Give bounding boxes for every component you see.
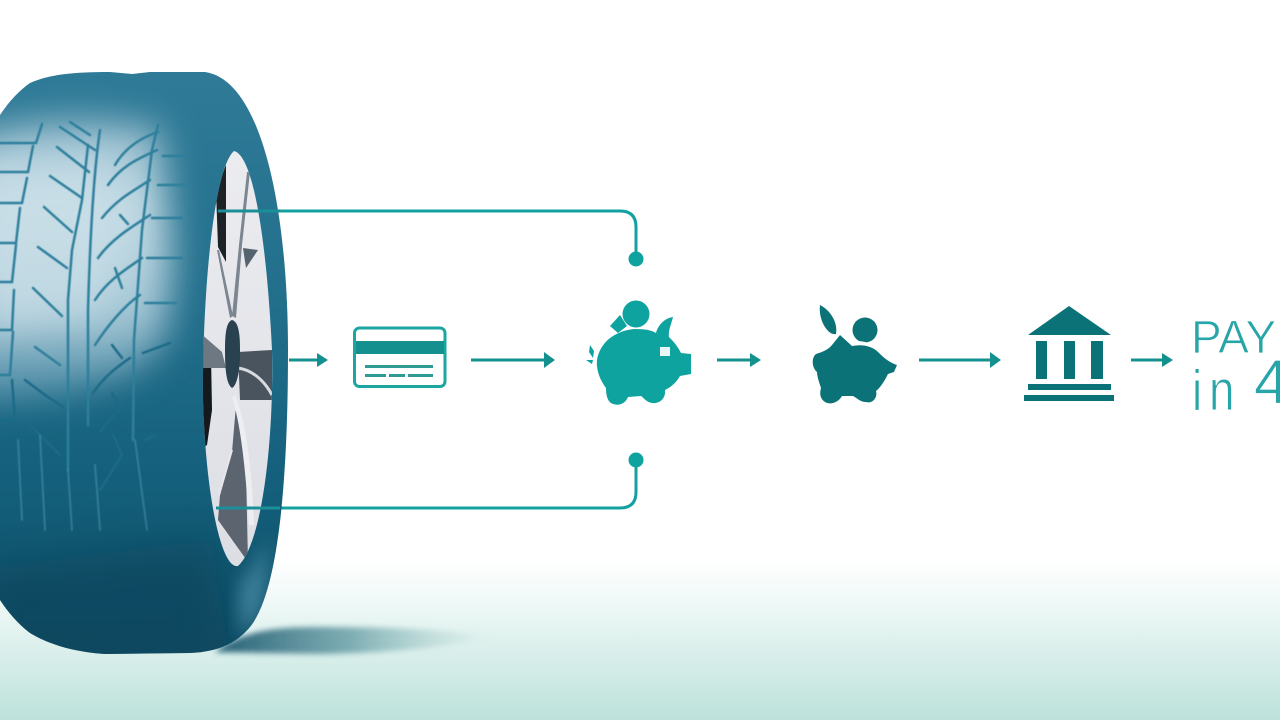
arrow: piggy to bank: [919, 352, 1001, 368]
tread light lines lower: [18, 435, 147, 530]
tyre shadow: [215, 627, 490, 654]
tread grooves upper: [0, 122, 186, 470]
top line over rim: [218, 210, 280, 212]
right spoke: [238, 350, 272, 400]
rim opening: [202, 151, 272, 566]
sidewall light: [240, 535, 270, 640]
arrow: bank to text: [1131, 353, 1173, 367]
wheel rim: [202, 151, 272, 566]
connector lines behind tyre: [220, 211, 636, 508]
icon: piggy bank with coin: [586, 300, 691, 405]
tread highlight: [0, 119, 172, 405]
hub: [225, 320, 240, 388]
icon: credit card: [354, 328, 445, 386]
icon: bank building: [1024, 306, 1114, 401]
brand text: Pay in 4: PAY: [1191, 311, 1276, 363]
inner dark well lower: [202, 350, 212, 446]
inner dark well upper: [216, 165, 226, 262]
upper left spoke: [203, 336, 226, 368]
lower spoke: [218, 405, 248, 562]
brand text: Pay in 4: i: [1192, 359, 1202, 423]
bottom line over rim: [216, 506, 280, 510]
bright tread centre: [0, 155, 122, 335]
sidewall shade lower: [0, 546, 220, 654]
connector end dot: bottom: [628, 452, 644, 468]
tyre: [0, 60, 300, 670]
brand text: Pay in 4: [1191, 311, 1280, 423]
icon: piggy bank with plant: [813, 305, 897, 403]
arrow: tyre to card: [289, 353, 328, 367]
floor gradient: [0, 560, 1280, 720]
arrow: card to piggy: [471, 352, 555, 368]
spokes: [232, 172, 250, 318]
tread grooves lower: [0, 343, 170, 490]
brand text: Pay in 4: n: [1209, 359, 1235, 423]
connector end dot: top: [628, 252, 644, 266]
bottom connector: [220, 463, 636, 508]
tyre silhouette: [0, 60, 300, 660]
top connector: [220, 211, 636, 256]
arrow: piggy to second piggy: [717, 353, 761, 367]
